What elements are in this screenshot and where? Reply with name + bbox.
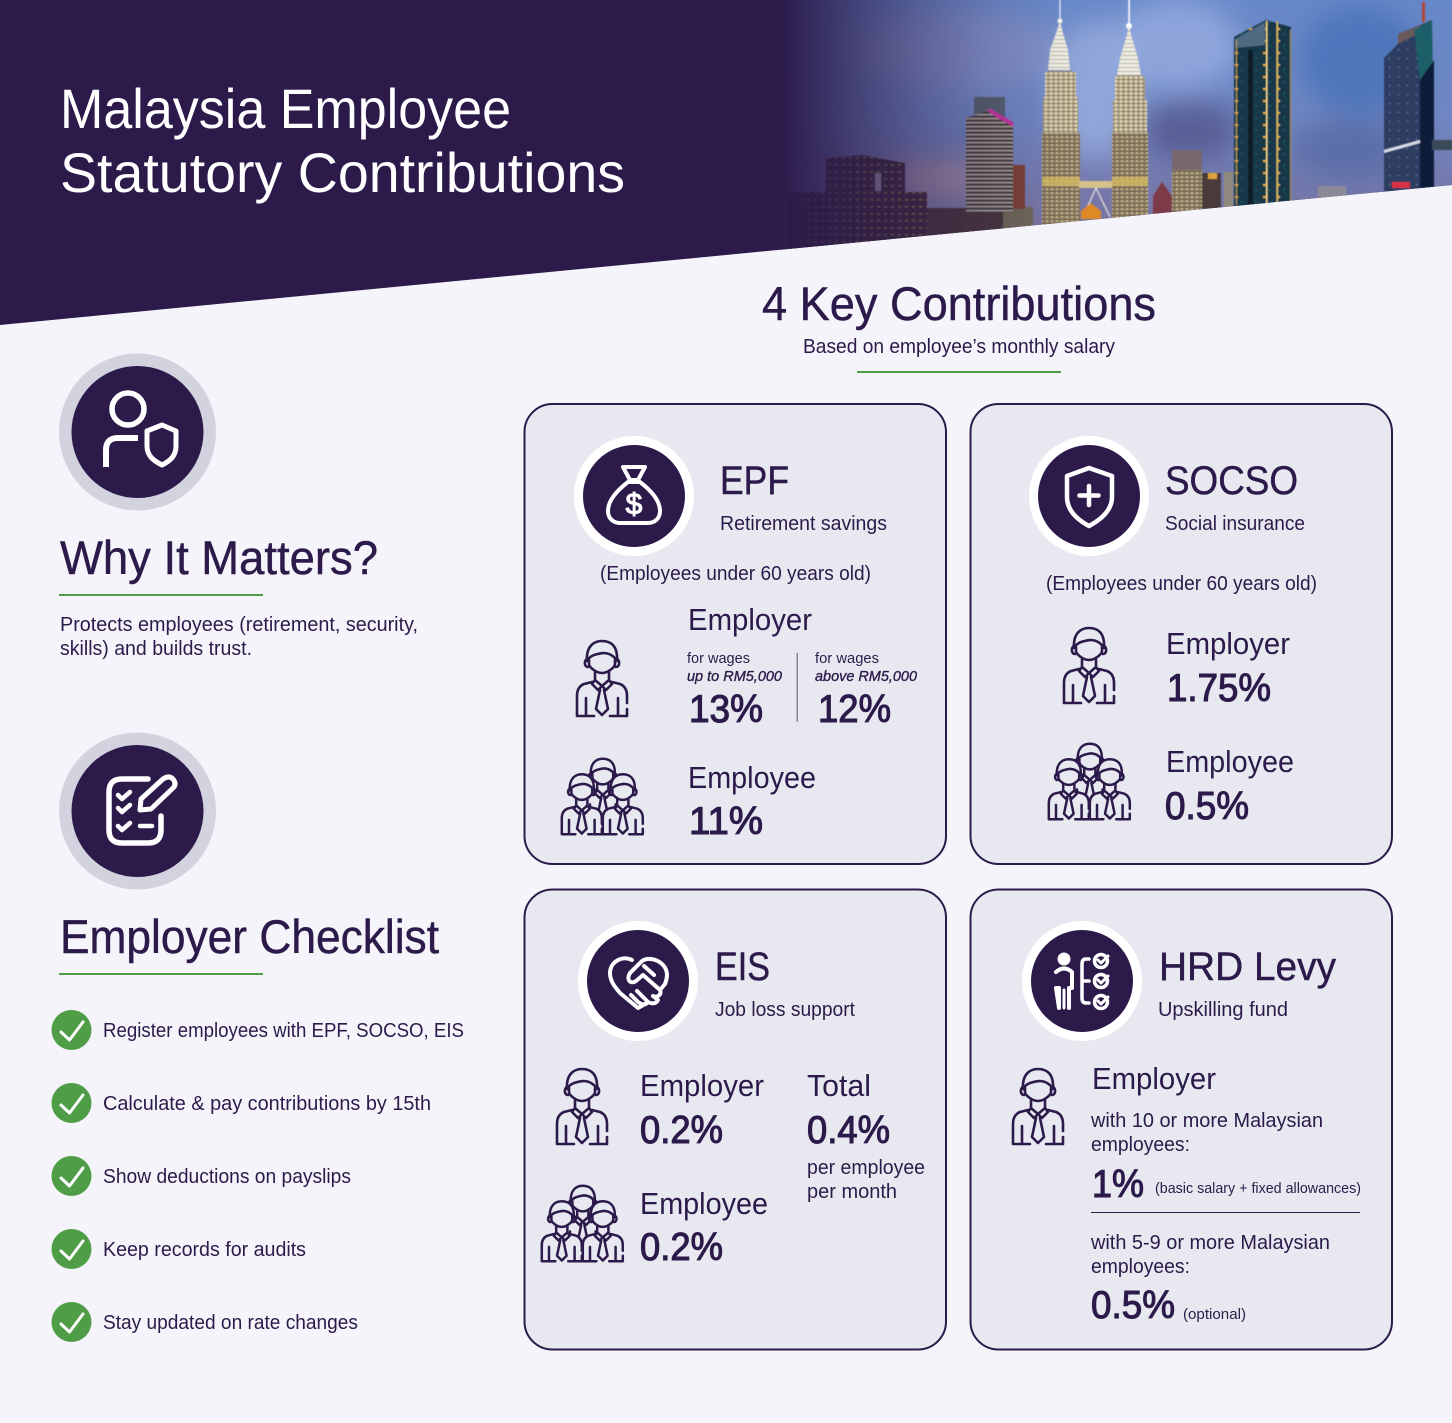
skyline photo [780,0,1452,262]
rate for 5-9 employees: employees: [1091,1255,1190,1278]
panel: EPF [524,404,946,864]
checklist item 2 [52,1083,431,1123]
checklist item 3: Show deductions on payslips [103,1166,351,1188]
small distant building [1318,186,1346,198]
glass tower [1234,20,1291,210]
title: Statutory Contributions [60,141,625,204]
icon: money bag [574,436,694,556]
SOCSO heading: Social insurance [1165,512,1305,535]
EPF employer rates: above RM5,000 [815,668,918,685]
EIS heading: EIS [715,945,770,989]
Petronas tower one [1042,0,1080,225]
EPF employer rates: for wages [687,650,750,667]
SOCSO employee rate: 0.5% [1165,785,1249,828]
title [60,77,625,204]
rate for 5-9 employees: 0.5% [1091,1284,1175,1327]
EPF employee rate: 11% [689,800,763,843]
EIS employer rate [640,1068,764,1152]
icon: employer [557,1069,607,1144]
section heading: 4 key contributions [762,277,1156,373]
EPF heading: EPF [720,459,789,503]
EPF employee rate: Employee [688,760,816,795]
icon: handshake heart [578,921,698,1041]
rate for 10 or more employees: with 10 or more Malaysian [1090,1109,1323,1132]
rate for 5-9 employees: (optional) [1183,1307,1246,1323]
left building cluster [787,154,1034,250]
rate for 10 or more employees: 1% [1092,1163,1144,1206]
EPF employer rates [687,602,918,731]
icon: employees [1049,744,1130,819]
panel: EIS [524,890,946,1350]
EIS heading [715,945,855,1021]
icon: checklist and pencil [59,732,216,890]
EIS total rate: 0.4% [807,1109,890,1152]
icon: employer [1064,628,1114,703]
HRD Levy heading: Upskilling fund [1158,998,1288,1021]
title: Malaysia Employee [60,77,511,140]
icon: shield with plus [1029,436,1149,556]
SOCSO employee rate [1165,744,1294,828]
panel: employer checklist [52,732,464,1342]
panel: HRD Levy [970,890,1392,1350]
EPF employee rate [688,760,816,843]
SOCSO employee rate: Employee [1166,744,1294,779]
section heading: 4 key contributions: 4 Key Contributions [762,277,1156,330]
HRD Levy heading [1158,945,1336,1021]
icon: person with checklist [1022,921,1142,1041]
description: skills) and builds trust. [60,638,252,660]
right glass tower [1384,2,1452,192]
Petronas tower two [1112,0,1148,219]
EPF employer rates: 12% [818,688,891,731]
EPF employer rates: Employer [688,602,812,637]
EPF heading: Retirement savings [720,512,887,535]
checklist item 5 [52,1302,358,1342]
checklist item 2: Calculate & pay contributions by 15th [103,1093,431,1115]
icon: employer [577,641,627,716]
rate for 10 or more employees: employees: [1091,1133,1190,1156]
checklist item 4 [52,1229,306,1269]
EIS employee rate: 0.2% [640,1226,723,1269]
icon: money bag: $ [626,488,643,521]
EIS total rate [807,1068,925,1203]
icon: person with shield [59,354,216,510]
description [60,614,418,660]
SOCSO employer rate: 1.75% [1167,667,1271,710]
section heading: 4 key contributions: Based on employee’s monthly salary [803,335,1116,358]
rate for 10 or more employees [1090,1109,1361,1206]
SOCSO employer rate: Employer [1166,626,1290,661]
SOCSO heading [1165,459,1305,535]
checklist item 4: Keep records for audits [103,1239,306,1261]
description: Protects employees (retirement, security, [60,614,418,636]
HRD Levy heading: HRD Levy [1159,945,1336,989]
HRD Levy employer label: Employer [1092,1061,1216,1096]
EIS employer rate: Employer [640,1068,764,1103]
icon: employer [1013,1069,1063,1144]
panel: why it matters [59,354,418,660]
rate for 5-9 employees: with 5-9 or more Malaysian [1090,1231,1330,1254]
EIS total rate: per employee [807,1156,925,1179]
EPF heading [720,459,887,535]
checklist item 3 [52,1156,351,1196]
panel: SOCSO [970,404,1392,864]
EIS total rate: Total [807,1068,871,1103]
SOCSO employer rate [1166,626,1290,710]
EPF employer rates: up to RM5,000 [687,668,783,685]
SOCSO heading: SOCSO [1165,459,1298,503]
SOCSO eligibility note: (Employees under 60 years old) [1046,572,1317,595]
striped office tower [966,97,1025,212]
heading: Employer Checklist [60,910,439,963]
checklist item 1 [52,1010,464,1050]
checklist item 5: Stay updated on rate changes [103,1312,358,1334]
checklist item 1: Register employees with EPF, SOCSO, EIS [103,1020,464,1042]
skybridge [1079,181,1112,219]
EIS total rate: per month [807,1180,897,1203]
EIS employee rate [640,1186,768,1269]
EPF employer rates: for wages [815,650,879,667]
EIS employer rate: 0.2% [640,1109,723,1152]
EIS employee rate: Employee [640,1186,768,1221]
EPF employer rates: 13% [689,688,763,731]
header banner [0,0,1452,325]
EIS heading: Job loss support [715,998,855,1021]
rate for 5-9 employees [1090,1231,1330,1327]
mid-rise buildings [1153,150,1233,215]
icon: employees [542,1186,623,1261]
rate for 10 or more employees: (basic salary + fixed allowances) [1155,1181,1361,1197]
icon: employees [562,759,643,834]
photo fade overlay [780,0,1028,250]
heading: Why It Matters? [60,531,378,584]
EPF eligibility note: (Employees under 60 years old) [600,562,871,585]
